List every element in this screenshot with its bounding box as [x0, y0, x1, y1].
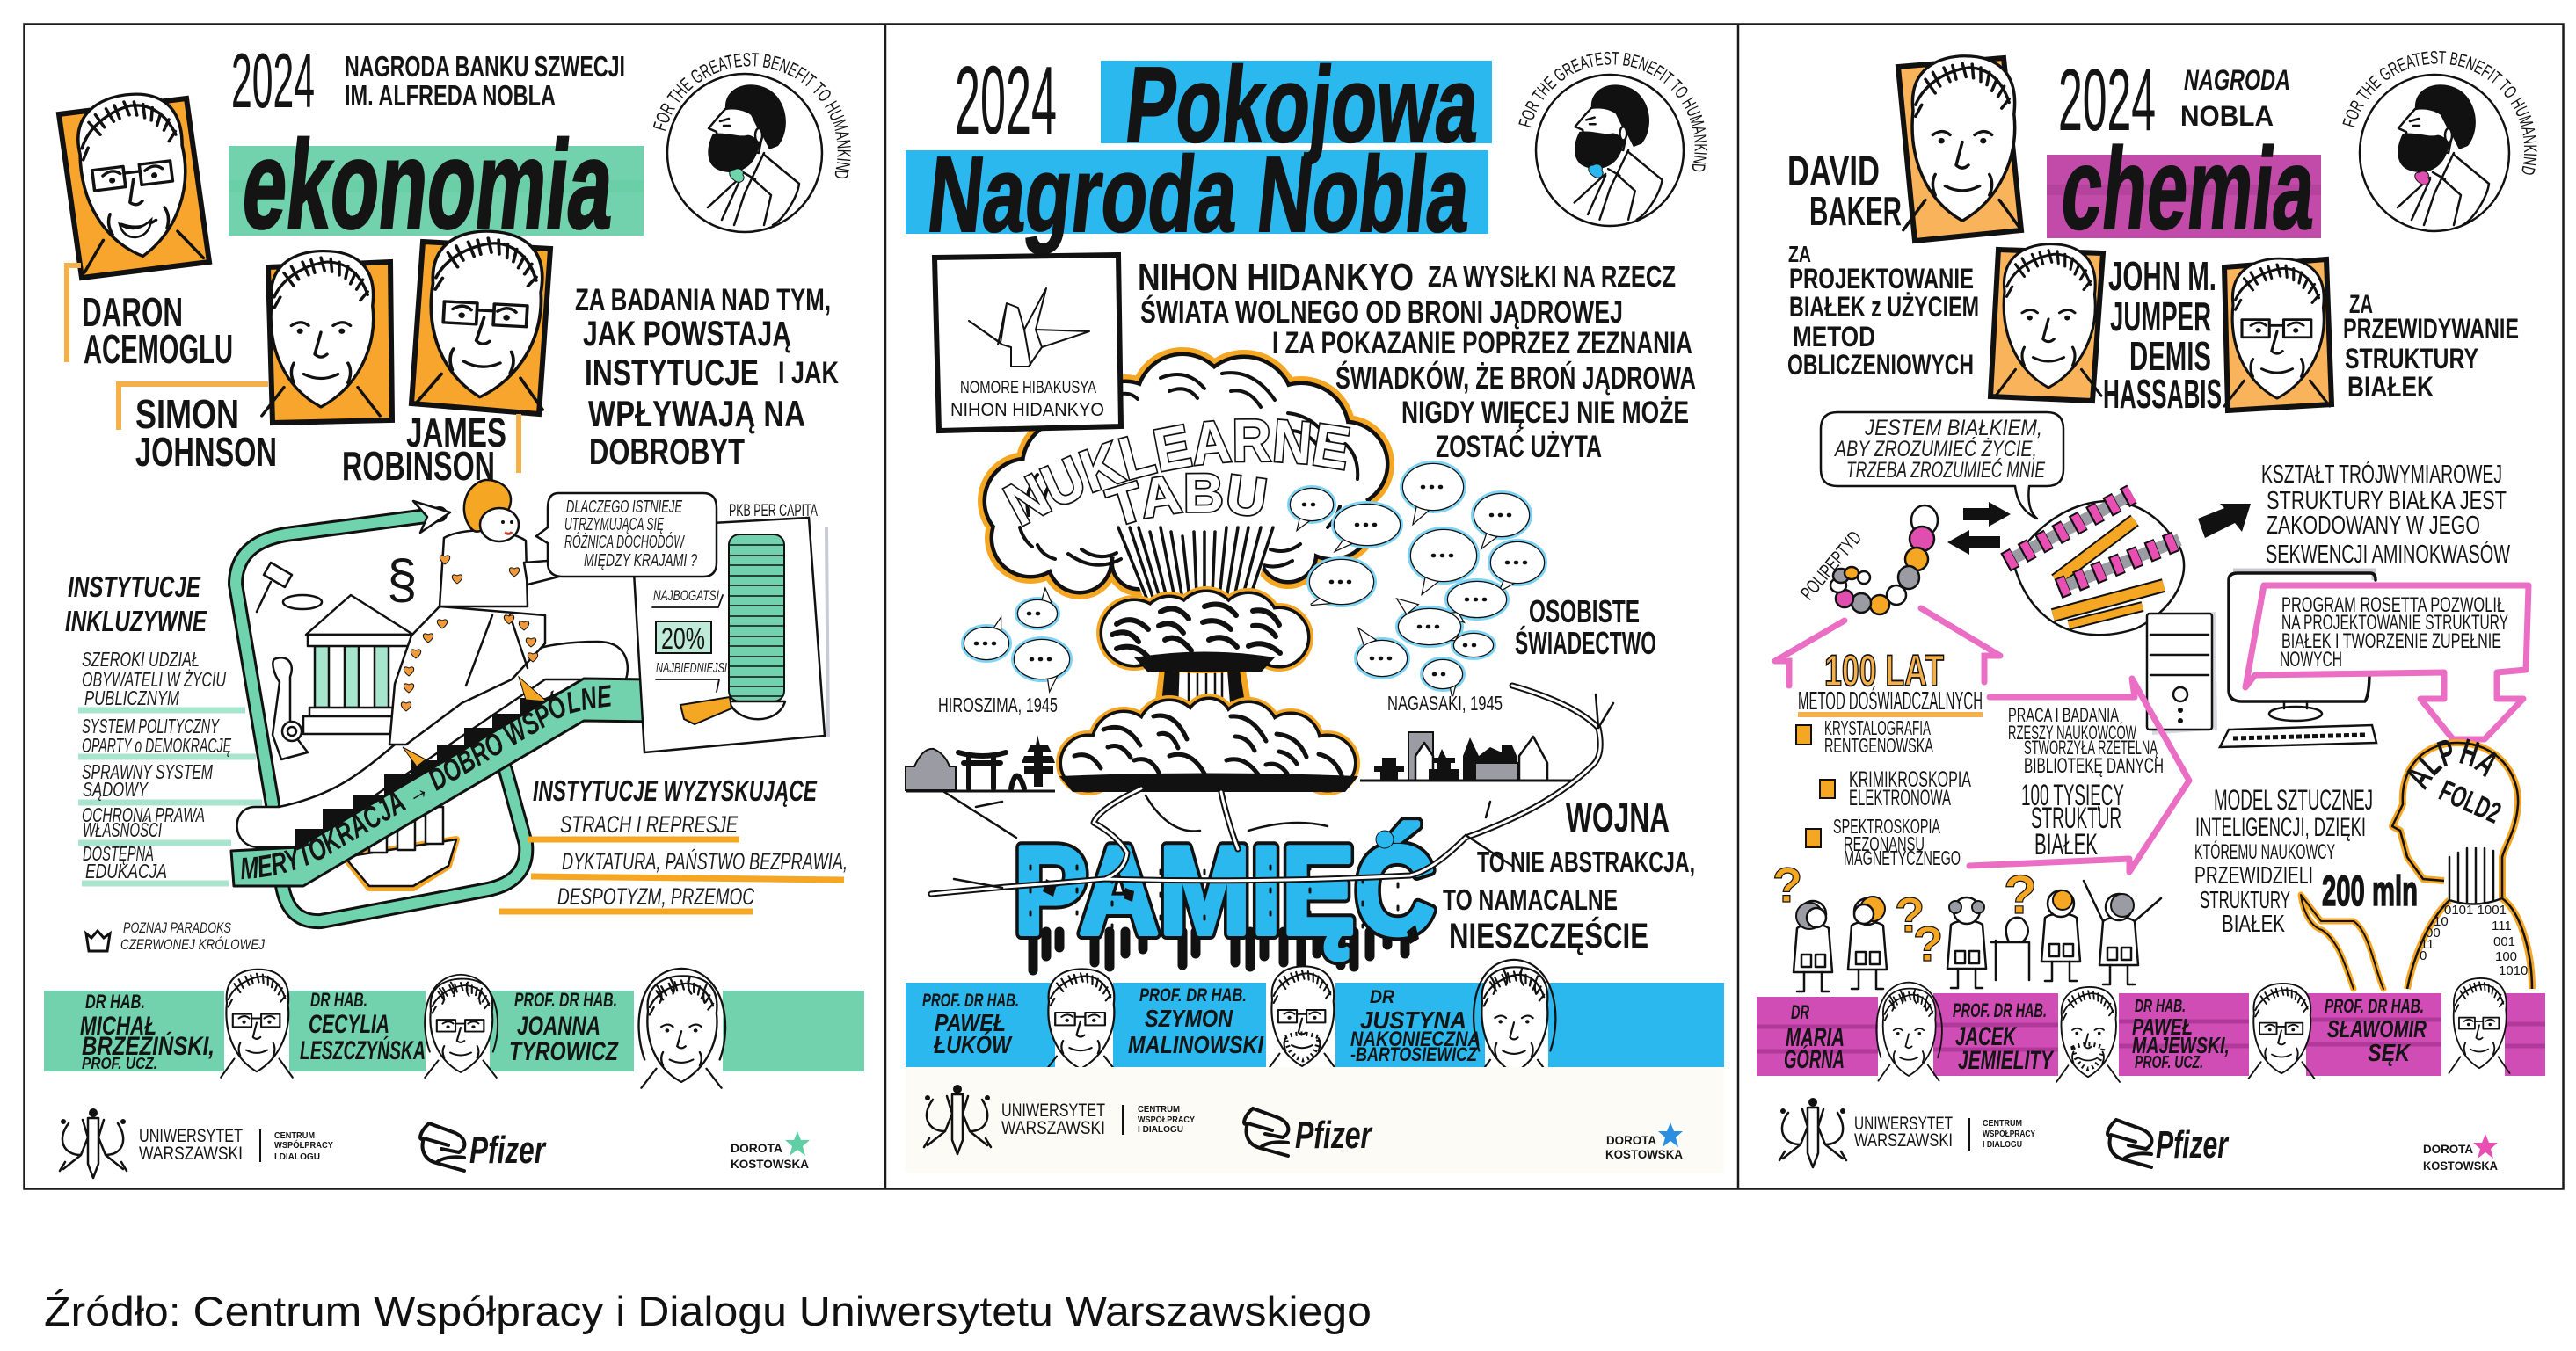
list: instytucje inkluzywne: DOSTĘPNA: [83, 842, 154, 865]
rosetta note with arrow: NOWYCH: [2280, 648, 2342, 672]
footer logos: [1779, 1098, 2498, 1173]
names and citation: Baker: ZA: [1788, 241, 1811, 267]
alphafold head figure: 10: [2434, 914, 2449, 929]
portrait: Baker: [1898, 56, 2021, 241]
experts band: DR HAB.: [2135, 997, 2186, 1016]
citation text: ZOSTAĆ UŻYTA: [1436, 429, 1602, 464]
speech bubble: question: UTRZYMUJĄCA SIĘ: [564, 515, 664, 534]
experts band: LESZCZYŃSKA: [300, 1035, 426, 1065]
prize citation: DOBROBYT: [589, 431, 745, 472]
experts band: PAWEŁ: [2132, 1013, 2193, 1040]
experts band: JEMIELITY: [1958, 1046, 2055, 1075]
experts band: DR: [1370, 987, 1395, 1007]
names and citation: Baker: [1787, 149, 1979, 381]
footer cream: [906, 1067, 1724, 1173]
footer logos: Pfizer: [1295, 1114, 1373, 1157]
computer tower: [2147, 612, 2217, 735]
experts band: SĘK: [2368, 1039, 2411, 1066]
experts band: DR HAB.: [85, 991, 145, 1013]
laureate names: SIMON: [135, 391, 239, 437]
methods list: SPEKTROSKOPIA: [1833, 815, 1940, 838]
house: 100 years of methods: METOD DOŚWIADCZALNYCH: [1798, 686, 1983, 715]
names: Jumper and Hassabis: [2103, 253, 2222, 417]
names and citation: Baker: BAKER: [1809, 188, 1902, 234]
big pink arrow: STWORZYŁA RZETELNĄ: [2024, 737, 2158, 759]
chain of beads polypeptide: [1830, 505, 1938, 614]
big pink arrow: BIBLIOTEKĘ DANYCH: [2024, 754, 2164, 778]
portrait: Acemoglu: [59, 88, 209, 278]
methods list: MAGNETYCZNEGO: [1844, 846, 1961, 869]
citation text: ŚWIATA WOLNEGO OD BRONI JĄDROWEJ: [1140, 294, 1623, 330]
ai model text: [2194, 784, 2373, 937]
roots: [931, 686, 1613, 894]
list: instytucje inkluzywne: SPRAWNY SYSTEM: [82, 760, 214, 783]
prize citation: ZA BADANIA NAD TYM,: [575, 283, 831, 317]
war statement: TO NAMACALNE: [1443, 883, 1618, 916]
footer logos: WARSZAWSKI: [1001, 1118, 1105, 1138]
heading chemia: [2047, 124, 2322, 254]
footer logos: I DIALOGU: [1983, 1140, 2022, 1150]
ai model text: STRUKTURY: [2200, 886, 2290, 913]
mushroom cloud: [986, 356, 1386, 792]
citation text: NIGDY WIĘCEJ NIE MOŻE: [1401, 396, 1689, 430]
experts band: SZYMON: [1145, 1005, 1233, 1032]
experts band: JACEK: [1955, 1022, 2018, 1051]
house: 100 years of methods: [1775, 608, 2000, 715]
footer logos: DOROTA: [731, 1141, 782, 1155]
footer logos: [60, 1108, 810, 1178]
names and citation: Baker: DAVID: [1787, 149, 1880, 195]
medallion: [1518, 51, 1707, 227]
experts band: CECYLIA: [309, 1010, 389, 1039]
experts band: PROF. DR HAB.: [1953, 999, 2047, 1021]
methods list: REZONANSU: [1844, 832, 1925, 855]
green frame arrow: [236, 501, 526, 921]
footer logos: CENTRUM: [1983, 1119, 2022, 1129]
ai model text: PRZEWIDZIELI: [2194, 861, 2313, 889]
heading band blue: Nagroda Nobla: [922, 134, 1476, 254]
experts band: [906, 960, 1724, 1079]
names and citation: Baker: BIAŁEK z UŻYCIEM: [1789, 291, 1979, 323]
panel: pokojowa: 2024: [955, 47, 1057, 155]
list: instytucje inkluzywne: [65, 570, 262, 883]
scientists group: ?: [2004, 865, 2037, 926]
methods list: KRYSTALOGRAFIA: [1824, 716, 1931, 739]
methods list: RENTGENOWSKA: [1824, 734, 1933, 757]
war statement: [1443, 795, 1695, 955]
protein illustration: [2005, 494, 2184, 635]
chart: PKB per capita: NAJBOGATSI: [653, 587, 719, 604]
footer logos: Pfizer: [469, 1129, 547, 1172]
subtitle: NOBLA: [2180, 100, 2274, 132]
label osobiste swiadectwo: [1515, 593, 1656, 661]
word pamiec with drips: PAMIĘĆ: [1014, 821, 1435, 961]
list: instytucje wyzyskujace: DYKTATURA, PAŃSTWO BEZPRAWIA,: [562, 848, 848, 875]
big pink arrow: RZESZY NAUKOWCÓW: [2008, 722, 2136, 744]
skyline left: [906, 735, 1055, 791]
portrait: Hassabis: [2224, 258, 2332, 410]
prize citation: [575, 283, 839, 472]
experts band: NAKONIECZNA: [1350, 1028, 1481, 1051]
nuclear taboo lettering: NUKLEARNE: [1001, 418, 1350, 527]
list: instytucje inkluzywne: EDUKACJA: [85, 860, 167, 883]
panel: ekonomia: [44, 37, 864, 1180]
heading band blue: [906, 44, 1492, 254]
experts band: JUSTYNA: [1360, 1006, 1466, 1034]
icon: ruined temple: [345, 807, 456, 888]
methods list: KRIMIKROSKOPIA: [1849, 767, 1971, 792]
list: instytucje wyzyskujace: STRACH I REPRESJE: [560, 811, 739, 838]
list: instytucje inkluzywne: WŁASNOŚCI: [83, 817, 162, 841]
hand: [2301, 895, 2383, 989]
protein structure text: ZAKODOWANY W JEGO: [2267, 512, 2480, 540]
ai model text: KTÓREMU NAUKOWCY: [2194, 840, 2335, 864]
experts band: PROF. UCZ.: [2135, 1053, 2203, 1072]
big pink arrow: BIAŁEK: [2034, 828, 2098, 861]
chart: PKB per capita: PKB PER CAPITA: [729, 502, 818, 520]
computer monitor: [2220, 570, 2376, 747]
arrows between polypeptide and protein: [1947, 502, 2251, 555]
experts band: -BARTOSIEWICZ: [1350, 1043, 1478, 1065]
escalator band with text: MERYTOKRACJA → DOBRO WSPÓLNE: [241, 685, 611, 879]
speech bubble: question: RÓŻNICA DOCHODÓW: [564, 532, 685, 552]
list: instytucje wyzyskujace: [499, 774, 848, 912]
footer logos: UNIWERSYTET: [139, 1126, 243, 1146]
icon: gavel: [257, 563, 322, 612]
subtitle: IM. ALFREDA NOBLA: [345, 79, 556, 112]
icon: classical temple: [303, 595, 413, 734]
ai model text: BIAŁEK: [2222, 910, 2285, 937]
footer logos: KOSTOWSKA: [1605, 1147, 1683, 1161]
alphafold head figure: 100: [2495, 949, 2517, 964]
footer logos: DOROTA: [1606, 1133, 1656, 1147]
crane logo box: NIHON HIDANKYO: [950, 400, 1104, 420]
label osobiste swiadectwo: ŚWIADECTWO: [1515, 624, 1656, 661]
icon: crown note: POZNAJ PARADOKS: [123, 919, 231, 936]
footer logos: I DIALOGU: [1138, 1125, 1183, 1135]
citation: Jumper and Hassabis: ZA: [2349, 290, 2373, 319]
alphafold head figure: 0101 1001: [2444, 903, 2507, 918]
speech bubble: protein: ABY ZROZUMIEĆ ŻYCIE,: [1833, 436, 2037, 461]
citation text: NIHON HIDANKYO: [1138, 256, 1414, 299]
icon: crown note: [86, 919, 265, 953]
alphafold head figure: 111: [2492, 919, 2512, 933]
experts band: BRZEZIŃSKI,: [82, 1031, 215, 1061]
footer logos: [924, 1085, 1683, 1161]
crane logo box: NOMORE HIBAKUSYA: [960, 379, 1096, 397]
skyline right: [1360, 732, 1576, 781]
city labels: NAGASAKI, 1945: [1387, 692, 1503, 715]
medallion: FOR THE GREATEST BENEFIT TO HUMANKIND: [1518, 51, 1707, 172]
experts band: PROF. DR HAB.: [1139, 985, 1247, 1006]
experts band: MICHAŁ: [80, 1012, 156, 1041]
icon: crown note: CZERWONEJ KRÓLOWEJ: [120, 936, 265, 953]
names: Jumper and Hassabis: JUMPER: [2110, 294, 2211, 339]
chart: PKB per capita: [631, 502, 828, 752]
footer logos: KOSTOWSKA: [2423, 1159, 2498, 1173]
experts band: JOANNA: [517, 1012, 600, 1041]
speech bubble: question: MIĘDZY KRAJAMI ?: [584, 551, 698, 570]
list: instytucje inkluzywne: OPARTY o DEMOKRACJĘ: [82, 734, 231, 757]
panel: ekonomia: 2024: [231, 37, 315, 124]
portrait: Jumper: [1990, 244, 2103, 401]
scientists group: ?: [1913, 916, 1943, 971]
experts band: [1757, 978, 2545, 1082]
footer logos: WSPÓŁPRACY: [1983, 1128, 2035, 1139]
list: instytucje inkluzywne: OCHRONA PRAWA: [82, 803, 205, 826]
prize citation: I JAK: [778, 356, 839, 390]
names: Jumper and Hassabis: JOHN M.: [2108, 253, 2216, 299]
rosetta note with arrow: [2245, 585, 2529, 739]
list: instytucje inkluzywne: INKLUZYWNE: [65, 605, 207, 637]
prize citation: JAK POWSTAJĄ: [583, 315, 791, 353]
methods list: [1796, 716, 1971, 869]
speech bubble: question: DLACZEGO ISTNIEJE: [566, 498, 682, 517]
footer logos: WARSZAWSKI: [139, 1144, 243, 1164]
heading ekonomia: ekonomia: [236, 115, 622, 255]
alphafold head figure: FOLD2: [2434, 774, 2506, 831]
200 mln: 200 mln: [2322, 868, 2418, 915]
names and citation: Baker: PROJEKTOWANIE: [1789, 263, 1974, 294]
big pink arrow: [1969, 679, 2189, 872]
alphafold head figure: [2389, 738, 2536, 990]
war statement: NIESZCZĘŚCIE: [1449, 915, 1648, 955]
speech bubble: protein: TRZEBA ZROZUMIEĆ MNIE: [1846, 457, 2045, 483]
list: instytucje inkluzywne: OBYWATELI W ŻYCIU: [82, 668, 226, 691]
names: Jumper and Hassabis: HASSABIS: [2103, 371, 2222, 417]
heading chemia: chemia: [2056, 124, 2322, 254]
experts band: PROF. UCZ.: [82, 1055, 157, 1072]
experts band: [44, 969, 864, 1088]
footer logos: WARSZAWSKI: [1854, 1130, 1953, 1151]
experts band: PAWEŁ: [935, 1009, 1006, 1036]
crane logo box: [935, 255, 1121, 431]
alphafold head figure: 00: [2426, 926, 2441, 941]
footer logos: UNIWERSYTET: [1854, 1114, 1953, 1134]
experts band: PROF. DR HAB.: [922, 991, 1019, 1011]
subtitle: NAGRODA: [2184, 64, 2290, 96]
scientists group: ?: [1772, 857, 1802, 912]
citation: Jumper and Hassabis: BIAŁEK: [2347, 371, 2434, 403]
alphafold head figure: 0: [2420, 948, 2427, 963]
footer logos: Pfizer: [2156, 1123, 2230, 1166]
escalator handrail: [237, 642, 628, 847]
city labels: [938, 692, 1503, 716]
chart: PKB per capita: 20%: [661, 622, 705, 656]
citation: Jumper and Hassabis: [2343, 290, 2519, 403]
experts band: SŁAWOMIR: [2327, 1015, 2427, 1042]
ai model text: MODEL SZTUCZNEJ: [2214, 784, 2373, 816]
speech bubble: question: [536, 493, 717, 577]
experts band: DR: [1791, 1001, 1809, 1023]
speech bubble: protein: JESTEM BIAŁKIEM,: [1864, 416, 2042, 440]
laureate names: JAMES: [406, 410, 506, 455]
citation text: ZA WYSIŁKI NA RZECZ: [1428, 260, 1676, 293]
subtitle: [345, 50, 625, 112]
source caption: Źródło: Centrum Współpracy i Dialogu Uniwersytetu Warszawskiego: [44, 1288, 1372, 1334]
list: instytucje wyzyskujace: DESPOTYZM, PRZEMOC: [557, 883, 754, 910]
war statement: WOJNA: [1566, 795, 1670, 840]
experts band: DR HAB.: [310, 989, 367, 1011]
alphafold head figure: ALPHA: [2406, 738, 2497, 790]
word pamiec with drips: PAMIĘĆ: [1014, 821, 1435, 961]
war statement: TO NIE ABSTRAKCJA,: [1477, 846, 1695, 878]
chart: PKB per capita: NAJBIEDNIEJSI: [656, 661, 727, 676]
citation text: I ZA POKAZANIE POPRZEZ ZEZNANIA: [1272, 326, 1692, 360]
escalator steps: [295, 686, 571, 851]
experts band: MALINOWSKI: [1128, 1031, 1264, 1058]
citation text: ŚWIADKÓW, ŻE BROŃ JĄDROWA: [1335, 360, 1696, 396]
scientists group: [1772, 857, 2161, 991]
citation text: [1138, 256, 1696, 464]
experts band: GÓRNA: [1784, 1044, 1845, 1074]
experts band: PROF. DR HAB.: [514, 989, 617, 1011]
big pink arrow: STRUKTUR: [2031, 802, 2121, 835]
portrait: Robinson: [411, 228, 552, 414]
medallion: [2342, 51, 2537, 232]
experts band: PROF. DR HAB.: [2325, 995, 2424, 1017]
subtitle: [2180, 64, 2290, 132]
figure: woman on stairs: [389, 480, 571, 766]
speech bubble: protein: [1821, 412, 2063, 519]
footer logos: UNIWERSYTET: [1001, 1100, 1105, 1121]
citation: Jumper and Hassabis: STRUKTURY: [2345, 343, 2478, 374]
panel: chemia: [1757, 51, 2545, 1173]
footer logos: WSPÓŁPRACY: [1138, 1114, 1195, 1125]
name connectors: [67, 265, 519, 473]
icon: paragraph sign: §: [387, 549, 417, 610]
panel: chemia: 2024: [2058, 51, 2156, 149]
list: instytucje inkluzywne: PUBLICZNYM: [84, 686, 180, 709]
names and citation: Baker: OBLICZENIOWYCH: [1787, 349, 1974, 381]
prize citation: INSTYTUCJE: [585, 352, 759, 393]
house: 100 years of methods: 100 LAT: [1824, 646, 1944, 695]
laureate names: ACEMOGLU: [84, 326, 233, 372]
list: instytucje wyzyskujace: INSTYTUCJE WYZYSKUJĄCE: [533, 774, 818, 807]
footer logos: CENTRUM: [274, 1131, 315, 1141]
alphafold head figure: 1010: [2499, 963, 2528, 978]
medallion: FOR THE GREATEST BENEFIT TO HUMANKIND: [652, 53, 851, 178]
methods list: ELEKTRONOWA: [1849, 786, 1951, 810]
big pink arrow: PRACA I BADANIA: [2008, 704, 2119, 726]
protein structure text: [2261, 460, 2510, 569]
names: Jumper and Hassabis: DEMIS: [2129, 333, 2211, 379]
polypeptide label: POLIPEPTYD: [1796, 527, 1866, 604]
footer logos: I DIALOGU: [274, 1152, 320, 1162]
scientists group: ?: [1895, 887, 1925, 942]
subtitle: NAGRODA BANKU SZWECJI: [345, 50, 625, 83]
experts band: MAJEWSKI,: [2132, 1032, 2230, 1058]
list: instytucje inkluzywne: SYSTEM POLITYCZNY: [82, 715, 220, 737]
ai model text: INTELIGENCJI, DZIĘKI: [2195, 813, 2366, 842]
laureate names: [82, 289, 506, 489]
heading ekonomia: [229, 115, 644, 255]
laureate names: JOHNSON: [135, 429, 277, 475]
medallion: FOR THE GREATEST BENEFIT TO HUMANKIND: [2342, 51, 2537, 175]
panel: pokojowa: [905, 44, 1724, 1173]
experts band: ŁUKÓW: [933, 1031, 1013, 1058]
footer logos: DOROTA: [2423, 1142, 2473, 1156]
experts band: MARIA: [1786, 1023, 1845, 1052]
portrait: Johnson: [262, 251, 392, 423]
testimony speech bubbles: [964, 464, 1544, 696]
footer logos: WSPÓŁPRACY: [274, 1139, 333, 1151]
prize citation: WPŁYWAJĄ NA: [588, 393, 805, 434]
list: instytucje inkluzywne: SZEROKI UDZIAŁ: [82, 648, 200, 671]
list: instytucje inkluzywne: INSTYTUCJE: [68, 570, 201, 603]
big pink arrow: 100 TYSIĘCY: [2021, 779, 2124, 812]
list: instytucje inkluzywne: SĄDOWY: [83, 778, 149, 801]
medallion: [652, 53, 851, 234]
footer logos: KOSTOWSKA: [731, 1157, 809, 1171]
laureate names: DARON: [82, 289, 183, 335]
heading band blue: Pokojowa: [1120, 44, 1485, 164]
city labels: HIROSZIMA, 1945: [938, 694, 1058, 716]
names and citation: Baker: METOD: [1793, 321, 1875, 352]
alphafold head figure: 11: [2420, 937, 2434, 952]
alphafold head figure: 001: [2493, 934, 2515, 949]
label osobiste swiadectwo: OSOBISTE: [1529, 593, 1640, 629]
footer logos: CENTRUM: [1138, 1105, 1180, 1115]
experts band: TYROWICZ: [509, 1037, 619, 1066]
nuclear taboo lettering: TABU: [1102, 473, 1268, 526]
icon: scroll: [273, 657, 308, 759]
laureate names: ROBINSON: [342, 443, 495, 489]
